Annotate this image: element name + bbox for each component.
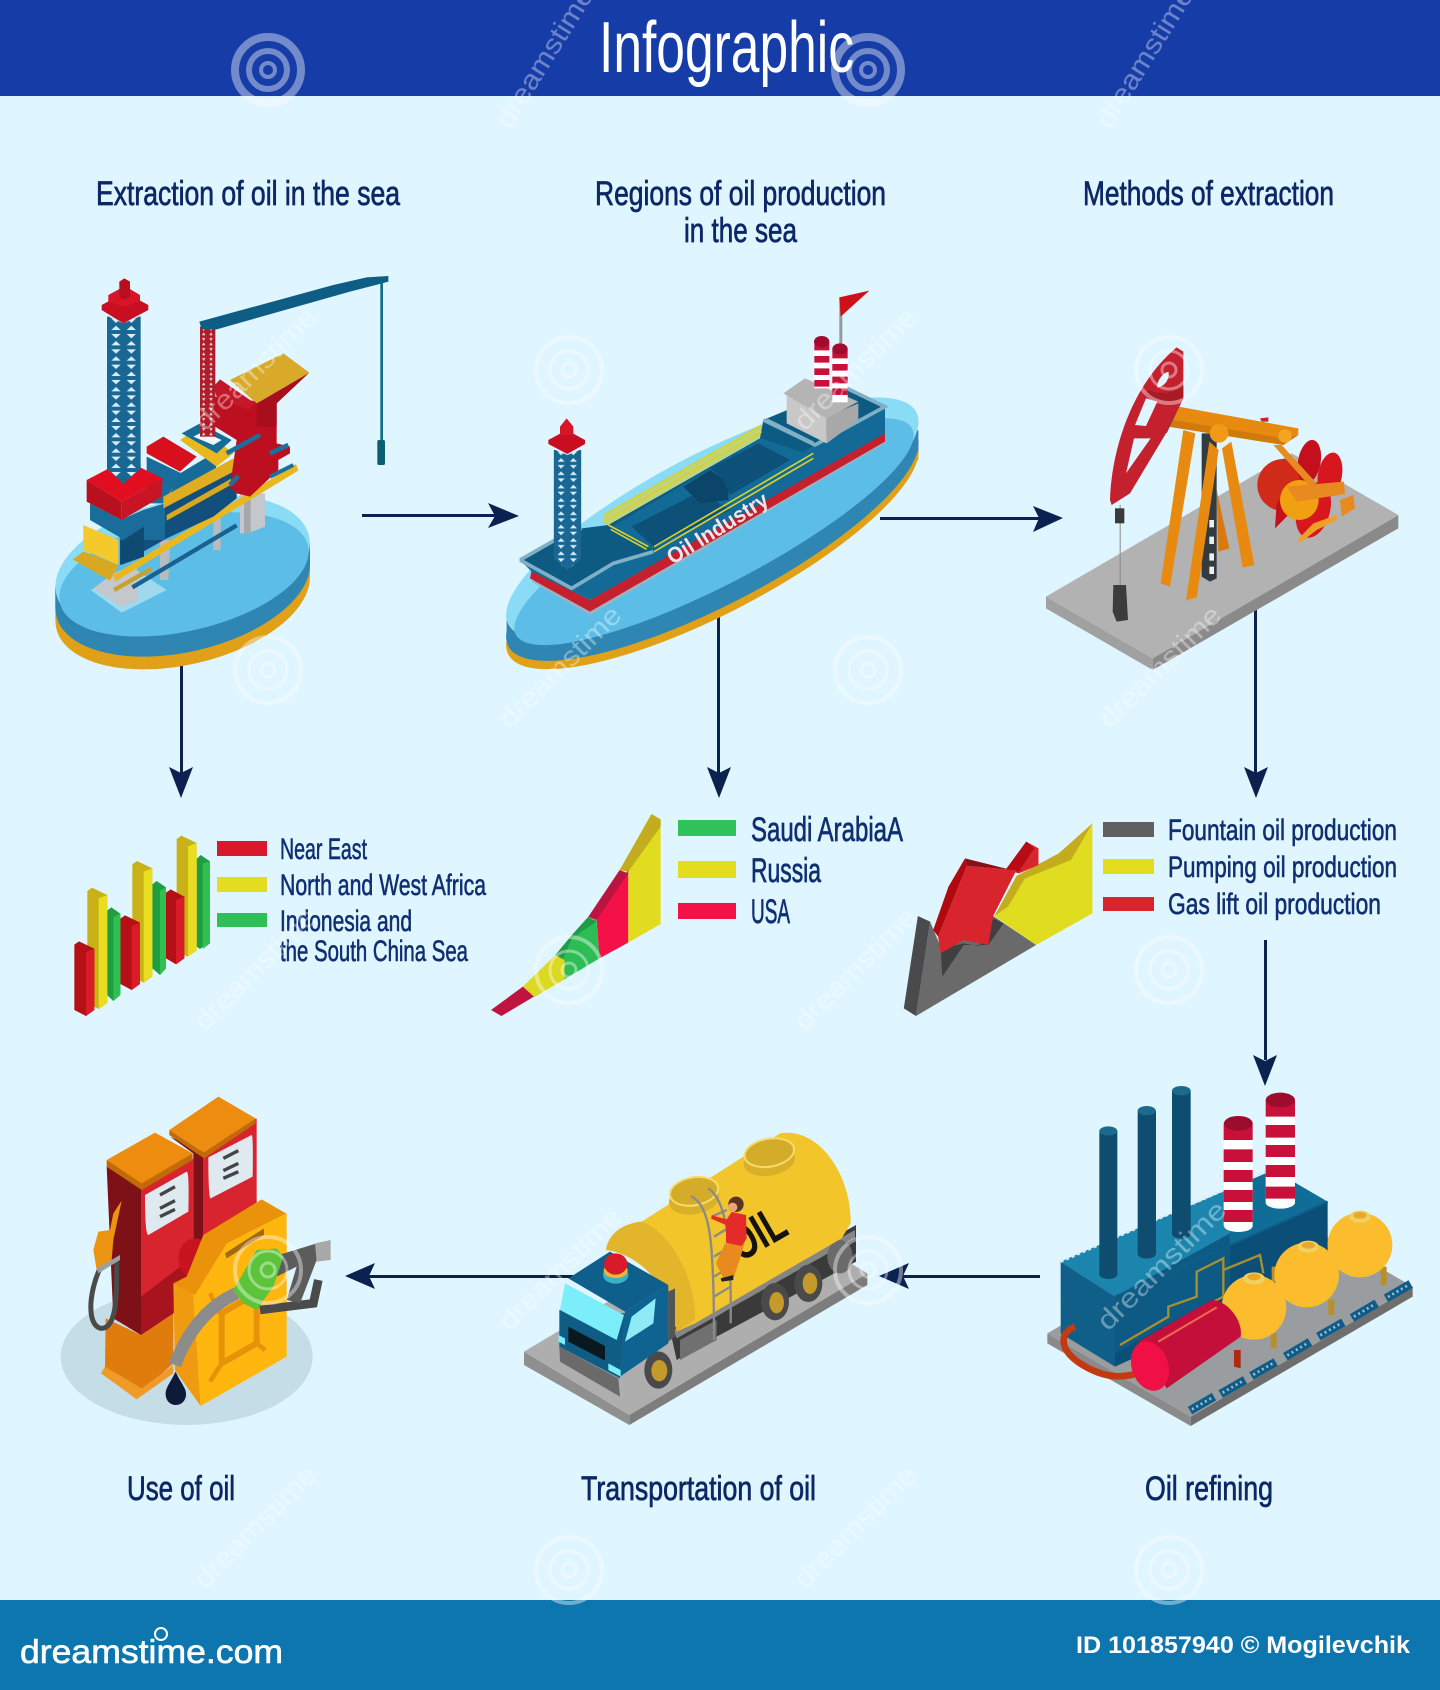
legend: regions xyxy=(678,811,903,931)
red crane house xyxy=(213,353,309,497)
polish rod and wellhead xyxy=(1113,505,1128,622)
heading: methods of extraction: Methods of extraction xyxy=(1083,175,1334,213)
tank lettering: OIL xyxy=(717,1195,796,1272)
label: use of oil: Use of oil xyxy=(127,1470,235,1508)
nozzle xyxy=(175,1240,331,1365)
illustration: refinery xyxy=(1047,1086,1413,1426)
legend: methods xyxy=(1103,814,1397,921)
near east: Near East xyxy=(280,833,367,866)
building xyxy=(1061,1168,1328,1367)
concrete slab xyxy=(524,1210,867,1425)
dark chimneys xyxy=(1099,1086,1191,1279)
watermark overlay: dreamstime xyxy=(1092,599,1227,734)
heading: regions of oil production: Regions of oil production xyxy=(595,175,886,213)
red block xyxy=(87,460,163,520)
arrow: ship to pumpjack xyxy=(880,506,1063,532)
tank xyxy=(606,1133,851,1332)
sea base xyxy=(478,354,946,712)
label: transportation of oil: Transportation of oil xyxy=(581,1470,816,1508)
footer credit: ID 101857940 © Mogilevchik xyxy=(1076,1632,1411,1659)
legend: bar chart xyxy=(217,833,486,968)
footer band xyxy=(0,1600,1440,1690)
heading: regions of oil production: in the sea xyxy=(684,212,797,250)
sea base xyxy=(42,472,324,692)
indonesia and south china sea: Indonesia and xyxy=(280,905,412,938)
pipes xyxy=(1120,1255,1263,1345)
braces xyxy=(114,525,237,590)
rig legs xyxy=(91,493,265,613)
chart: regions area xyxy=(491,814,661,1016)
deck xyxy=(73,423,298,582)
watermark overlay: dreamstime xyxy=(787,301,922,436)
bars xyxy=(74,836,210,1016)
back pump xyxy=(169,1097,257,1243)
saudi arabia xyxy=(678,811,903,849)
canister xyxy=(173,1199,287,1406)
ground shadow xyxy=(61,1288,313,1425)
rails behind deck xyxy=(604,425,762,525)
north and west africa: North and West Africa xyxy=(280,869,486,902)
rails xyxy=(604,425,813,552)
striped stacks xyxy=(1224,1093,1295,1232)
watermark overlay: dreamstime xyxy=(492,599,627,734)
A-frame legs xyxy=(1161,430,1254,601)
arrow: truck to pump station xyxy=(345,1263,573,1289)
gas lift: Gas lift oil production xyxy=(1168,888,1381,921)
fountain xyxy=(1103,814,1397,847)
hull xyxy=(520,387,885,615)
chart: bars by region xyxy=(74,836,210,1016)
watermark overlay xyxy=(187,0,1232,1603)
watermark overlay: dreamstime xyxy=(787,901,922,1036)
flag xyxy=(839,291,869,344)
oil drop xyxy=(166,1372,186,1405)
indonesia and south china sea: the South China Sea xyxy=(280,935,468,968)
arrow: methods to refinery xyxy=(1253,940,1277,1086)
watermark overlay: dreamstime xyxy=(492,1201,627,1336)
red cylinder tank xyxy=(1064,1300,1241,1396)
russia: Russia xyxy=(751,852,821,890)
superstructure xyxy=(783,378,858,443)
watermark overlay: dreamstime xyxy=(787,1459,922,1594)
russia xyxy=(678,852,821,890)
illustration: pumpjack xyxy=(1046,347,1398,670)
indonesia and south china sea xyxy=(217,905,468,968)
title: Infographic xyxy=(599,8,854,88)
arrow: pumpjack to methods chart xyxy=(1244,608,1268,798)
header band xyxy=(0,0,1440,96)
north and west africa xyxy=(217,869,486,902)
illustration: fuel pump and canister xyxy=(61,1097,331,1425)
handset and hose xyxy=(91,1201,122,1328)
arrow: ship to region chart xyxy=(707,615,731,798)
hull lettering: Oil Industry xyxy=(662,487,773,569)
saudi arabia: Saudi ArabiaA xyxy=(751,811,903,849)
truck cab xyxy=(558,1252,675,1397)
watermark overlay: dreamstime xyxy=(1090,1194,1232,1336)
funnels xyxy=(814,336,848,402)
illustration: offshore oil rig xyxy=(42,276,388,692)
ladder xyxy=(691,1188,731,1340)
spherical tanks xyxy=(1222,1211,1392,1348)
cargo holds xyxy=(632,443,790,547)
front pump xyxy=(101,1133,193,1399)
arrow: refinery to truck xyxy=(879,1263,1040,1289)
usa xyxy=(678,893,790,931)
gas lift xyxy=(1103,888,1381,921)
crane xyxy=(199,276,388,465)
rail slots xyxy=(1190,1284,1411,1411)
footer logo: dreamstime.com xyxy=(20,1633,283,1670)
worker on ladder xyxy=(711,1197,747,1282)
arrow: rig to bar chart xyxy=(169,660,193,798)
usa: USA xyxy=(751,893,790,931)
back leg and column xyxy=(1202,433,1229,582)
arrow: rig to ship xyxy=(362,503,519,528)
near east xyxy=(217,833,367,866)
walking beam xyxy=(1168,406,1298,445)
watermark overlay: dreamstime xyxy=(187,1459,322,1594)
bow tower xyxy=(548,418,585,570)
chassis xyxy=(644,1225,856,1389)
illustration: tanker truck xyxy=(524,1133,867,1425)
ground slab xyxy=(1047,1203,1413,1426)
label: oil refining: Oil refining xyxy=(1145,1470,1273,1508)
derrick tower xyxy=(102,278,148,483)
concrete slab xyxy=(1046,453,1398,670)
gearbox xyxy=(1257,438,1355,542)
chart: methods area xyxy=(904,823,1092,1016)
pumping xyxy=(1103,851,1397,884)
watermark overlay: dreamstime xyxy=(187,901,322,1036)
illustration: oil tanker ship xyxy=(478,291,946,712)
watermark overlay: dreamstime xyxy=(187,301,322,436)
horsehead xyxy=(1110,347,1183,505)
heading: extraction of oil in the sea: Extraction of oil in the sea xyxy=(96,175,400,213)
